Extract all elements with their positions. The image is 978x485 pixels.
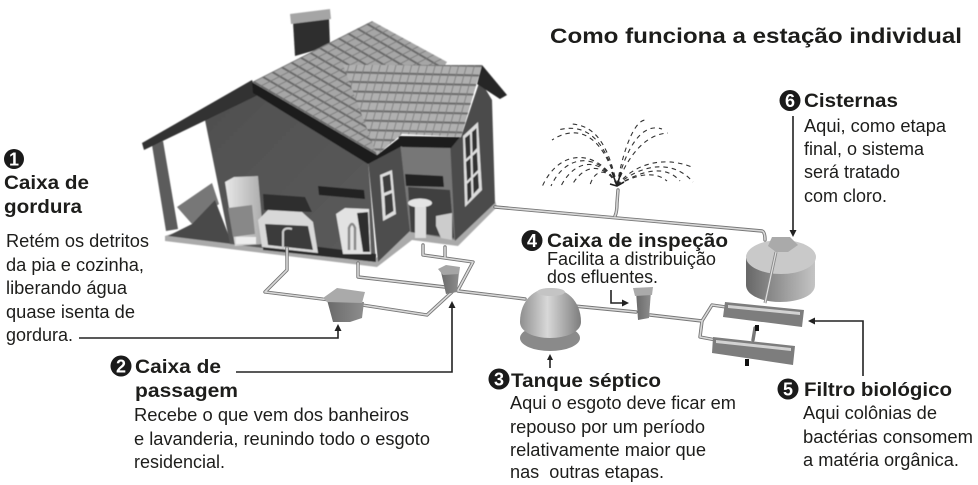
alcove interior	[400, 140, 456, 240]
porch bench	[177, 183, 219, 224]
step 4 text: dos efluentes.	[547, 267, 658, 287]
pedestal sink	[408, 198, 432, 238]
step 1 text: da pia e cozinha,	[6, 255, 144, 275]
badge 5	[778, 378, 798, 400]
roof main	[252, 21, 447, 155]
step 1 text: quase isenta de	[6, 302, 135, 322]
step 6 text: Aqui, como etapa	[804, 116, 947, 136]
step 1: caixa de gordura	[4, 149, 342, 345]
step 5 text: Aqui colônias de	[803, 403, 937, 423]
badge 4: 4	[527, 231, 537, 251]
step 5 heading: Filtro biológico	[804, 379, 952, 401]
step 2: caixa de passagem	[110, 301, 456, 472]
step 2 text: e lavanderia, reunindo todo o esgoto	[134, 429, 430, 449]
step 2 arrow	[236, 301, 456, 372]
step 2 text: residencial.	[134, 452, 225, 472]
step 3 arrow	[547, 354, 553, 368]
step 5 arrow	[808, 318, 863, 376]
step 4 arrow	[611, 290, 629, 306]
badge 2: 2	[116, 356, 126, 376]
badge 3: 3	[494, 370, 504, 390]
cistern	[746, 237, 816, 303]
step 6: cisternas	[780, 90, 947, 237]
porch roof	[142, 80, 258, 150]
step 3 heading: Tanque séptico	[511, 370, 661, 392]
pipe outlines	[265, 190, 765, 340]
step 6 heading: Cisternas	[804, 90, 898, 112]
step 5: filtro biológico	[778, 318, 973, 470]
washing machine	[336, 208, 371, 254]
sprinkler	[542, 120, 694, 187]
interior dark floor	[263, 240, 376, 262]
step 6 text: será tratado	[804, 162, 900, 182]
step 1 heading: Caixa de	[4, 172, 89, 194]
step 2 heading: passagem	[135, 380, 238, 402]
interior back furniture	[263, 194, 312, 212]
fridge	[225, 176, 264, 246]
gable eave	[477, 65, 507, 99]
step 1 text: liberando água	[6, 278, 128, 298]
toilet	[436, 213, 452, 240]
step 3 text: nas outras etapas.	[510, 462, 664, 482]
step 1 text: Retém os detritos	[6, 231, 149, 251]
badge 3	[488, 368, 510, 390]
interior dark shelf	[318, 186, 365, 199]
alcove ceiling shadow	[398, 136, 460, 148]
title: Como funciona a estação individual	[550, 25, 962, 48]
roof front gable	[343, 65, 482, 155]
house illustration	[142, 9, 507, 267]
window right	[463, 122, 482, 207]
septic tank	[520, 288, 581, 351]
step 5 text: bactérias consomem	[803, 427, 973, 447]
house floor slab	[165, 201, 497, 267]
step 4: caixa de inspeção	[522, 230, 728, 306]
badge 1: 1	[9, 150, 19, 170]
badge 5: 5	[783, 380, 793, 400]
junction box	[438, 265, 460, 294]
step 6 arrow	[790, 116, 796, 237]
step 1 arrow	[79, 324, 342, 338]
badge 2	[110, 356, 132, 376]
step 5 text: a matéria orgânica.	[803, 450, 959, 470]
step 2 heading: Caixa de	[135, 356, 221, 378]
badge 6: 6	[785, 91, 795, 111]
step 6 text: com cloro.	[804, 186, 887, 206]
dark alcove counter	[405, 174, 444, 187]
side wall	[368, 142, 411, 262]
roof eave shadow	[252, 82, 402, 164]
step 3 text: relativamente maior que	[510, 440, 706, 460]
step 2 text: Recebe o que vem dos banheiros	[134, 405, 409, 425]
grease trap box	[323, 288, 365, 322]
step 4 heading: Caixa de inspeção	[547, 230, 728, 252]
step 1 heading: gordura	[4, 196, 82, 218]
step 1 text: gordura.	[6, 325, 73, 345]
alcove lower interior	[408, 187, 454, 238]
step 3: tanque séptico	[488, 354, 736, 482]
badge 6	[780, 90, 800, 111]
biological filters	[712, 302, 804, 366]
chimney	[290, 9, 331, 56]
step 6 text: final, o sistema	[804, 139, 925, 159]
step 3 text: repouso por um período	[510, 417, 705, 437]
badge 4	[522, 230, 542, 251]
badge 1	[4, 149, 24, 170]
step 3 text: Aqui o esgoto deve ficar em	[510, 393, 736, 413]
main wall	[205, 90, 376, 262]
window left	[380, 170, 396, 221]
sink cabinet	[258, 210, 318, 253]
porch post	[152, 141, 178, 231]
step 4 text: Facilita a distribuição	[547, 249, 716, 269]
pipe highlights	[265, 190, 765, 340]
inspection box	[633, 287, 653, 320]
right wall	[450, 80, 495, 241]
pipe network	[265, 190, 765, 340]
porch ground	[168, 200, 232, 244]
